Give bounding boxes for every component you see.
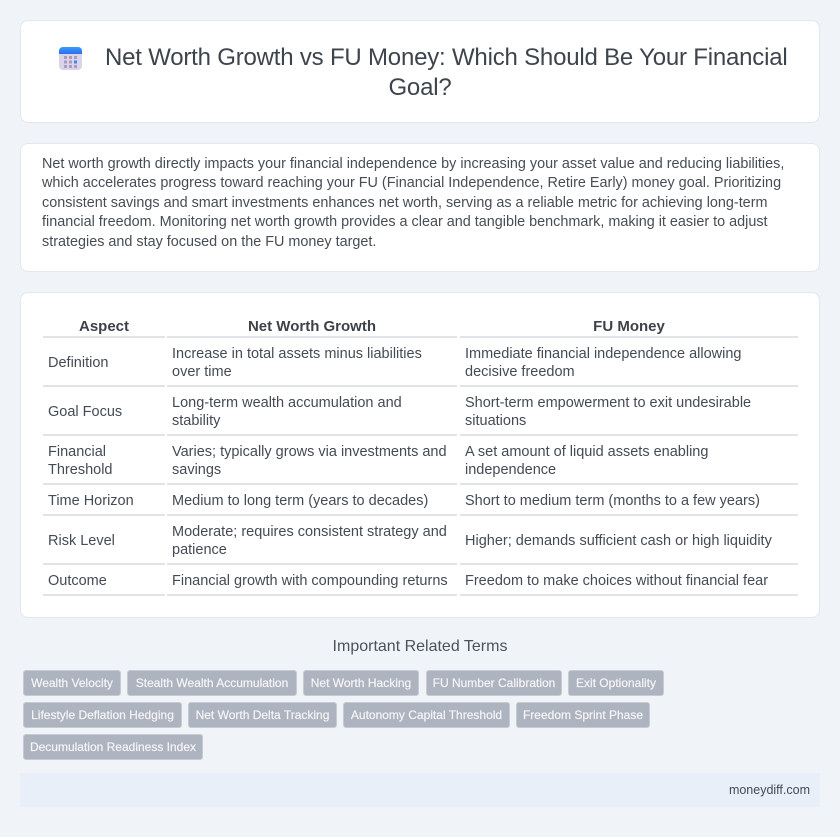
- related term tags: Net Worth Delta Tracking: [196, 708, 329, 722]
- related term tags: Exit Optionality: [576, 676, 656, 690]
- panel: comparison table: [20, 292, 820, 618]
- row: goal focus: Goal Focus: [48, 404, 122, 420]
- panel: introduction: [20, 143, 820, 272]
- row: definition: decisive freedom: [465, 364, 575, 380]
- row: goal focus: stability: [172, 413, 220, 429]
- row: financial threshold: Varies; typically grows via investments and: [172, 444, 447, 460]
- row: outcome: Outcome: [48, 573, 107, 589]
- panel: header: [20, 20, 820, 123]
- related term tags: Net Worth Hacking: [311, 676, 411, 690]
- related term tags: Lifestyle Deflation Hedging: [31, 708, 174, 722]
- title: Net Worth Growth vs FU Money: Which Should Be Your Financial: [105, 44, 788, 71]
- row: definition: [48, 346, 741, 380]
- row: risk level: [48, 524, 772, 558]
- row: time horizon: Medium to long term (years to decades): [172, 493, 428, 509]
- row: risk level: Moderate; requires consistent strategy and: [172, 524, 447, 540]
- row: time horizon: Time Horizon: [48, 493, 134, 509]
- row: goal focus: situations: [465, 413, 526, 429]
- related term tags: Autonomy Capital Threshold: [351, 708, 502, 722]
- row: goal focus: Long-term wealth accumulation and: [172, 395, 402, 411]
- row: definition: over time: [172, 364, 232, 380]
- row: financial threshold: Threshold: [48, 462, 112, 478]
- row: definition: Definition: [48, 355, 108, 371]
- intro text: strategies and stay focused on the FU money target.: [42, 234, 376, 250]
- row: time horizon: [48, 493, 760, 509]
- table header: [79, 318, 665, 335]
- intro text: Net worth growth directly impacts your financial independence by increasing your asset value and reducing liabilities,: [42, 156, 784, 172]
- row: financial threshold: independence: [465, 462, 556, 478]
- table header: Aspect: [79, 318, 129, 335]
- row: definition: Immediate financial independence allowing: [465, 346, 741, 362]
- intro text: consistent savings and smart investments enhances net worth, serving as a reliable metric for achieving long-term: [42, 195, 767, 211]
- row: risk level: Risk Level: [48, 533, 115, 549]
- table header: Net Worth Growth: [248, 318, 376, 335]
- row: financial threshold: Financial: [48, 444, 106, 460]
- related term tags: [23, 670, 664, 760]
- icon: calendar: [59, 47, 82, 70]
- row: risk level: Higher; demands sufficient cash or high liquidity: [465, 533, 772, 549]
- table header: FU Money: [593, 318, 665, 335]
- footer site name: moneydiff.com: [729, 783, 810, 797]
- intro text: which accelerates progress toward reaching your FU (Financial Independence, Retire Early) money goal. Prioritizing: [42, 175, 781, 191]
- row: time horizon: Short to medium term (months to a few years): [465, 493, 760, 509]
- heading: related terms: Important Related Terms: [333, 638, 507, 655]
- title: Goal?: [388, 74, 452, 101]
- related term tags: Decumulation Readiness Index: [30, 740, 196, 754]
- related term tags: Wealth Velocity: [31, 676, 113, 690]
- row: goal focus: Short-term empowerment to exit undesirable: [465, 395, 751, 411]
- row: outcome: Financial growth with compounding returns: [172, 573, 448, 589]
- row: financial threshold: savings: [172, 462, 221, 478]
- row: financial threshold: [48, 444, 708, 478]
- related term tags: FU Number Calibration: [433, 676, 555, 690]
- row: outcome: Freedom to make choices without financial fear: [465, 573, 768, 589]
- related term tags: Stealth Wealth Accumulation: [136, 676, 288, 690]
- row: goal focus: [48, 395, 751, 429]
- row: risk level: patience: [172, 542, 227, 558]
- related term tags: Freedom Sprint Phase: [523, 708, 643, 722]
- row: financial threshold: A set amount of liquid assets enabling: [465, 444, 708, 460]
- intro text: financial freedom. Monitoring net worth growth provides a clear and tangible benchmark, making it easier to adjust: [42, 214, 768, 230]
- intro text: [42, 156, 784, 250]
- row: definition: Increase in total assets minus liabilities: [172, 346, 422, 362]
- footer: [20, 773, 820, 807]
- title: [105, 44, 788, 101]
- row: outcome: [48, 573, 768, 589]
